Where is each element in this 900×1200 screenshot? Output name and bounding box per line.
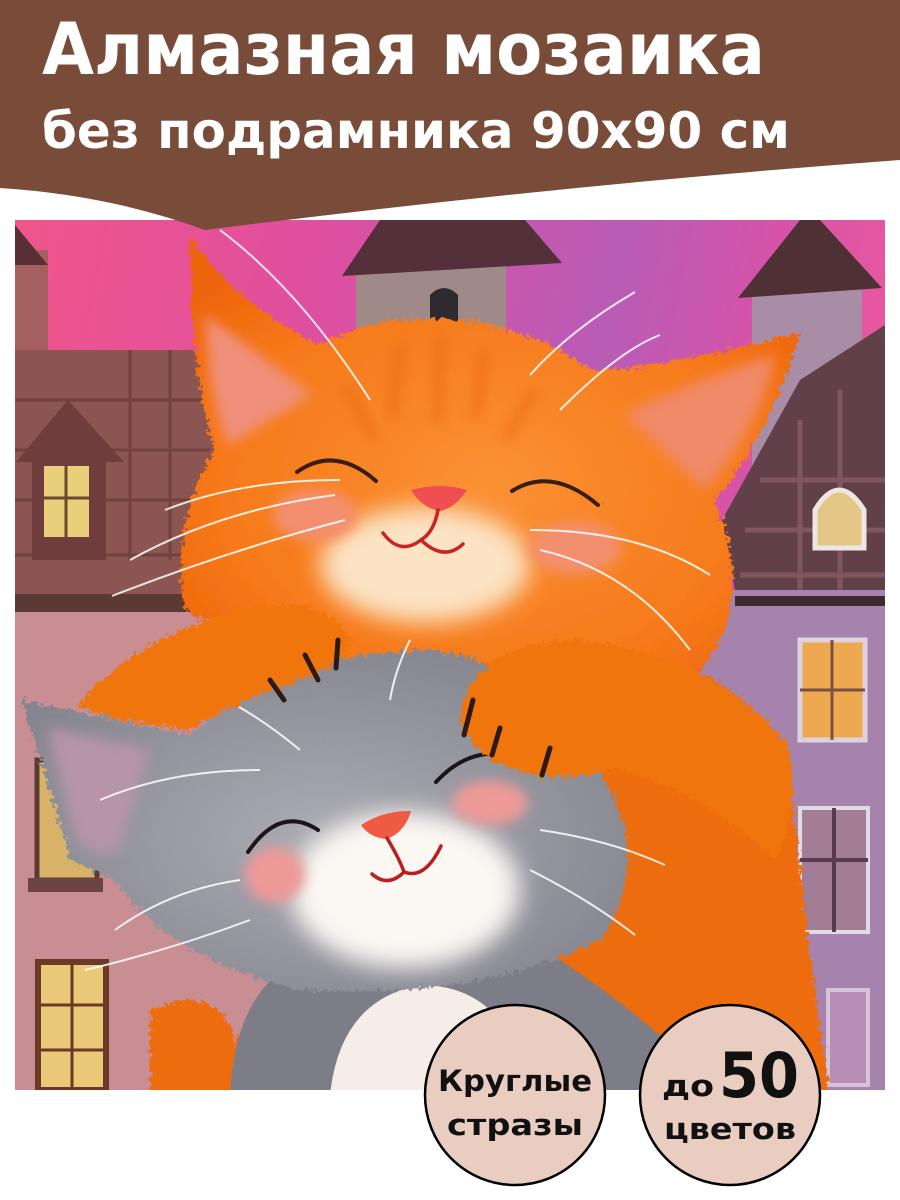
badge: up to 50 colours: до: [662, 1069, 714, 1103]
sky background: [15, 220, 885, 673]
badge: up to 50 colours: [640, 1005, 820, 1185]
muzzle: [320, 507, 530, 623]
nose: [361, 811, 411, 839]
eyes: [248, 753, 515, 852]
right ear inner: [625, 355, 775, 490]
subtitle: без подрамника 90х90 см: [42, 102, 790, 160]
building: center tower: [342, 220, 562, 334]
illustration: two cats on a rooftop: [15, 220, 885, 1095]
orange cat head: [112, 230, 800, 685]
orange cat body: [150, 645, 830, 1095]
white muzzle: [290, 812, 520, 968]
orange cat left paw: [78, 604, 352, 730]
grey cat: [20, 640, 665, 1095]
body: [230, 960, 665, 1095]
header banner: [0, 0, 900, 230]
building: right tower and house: [700, 220, 885, 1090]
head: [20, 650, 628, 991]
building: left house with roof and dormer: [15, 225, 270, 1090]
cheeks: [245, 847, 305, 903]
badge: round rhinestones: стразы: [447, 1108, 583, 1142]
orange cat right paw: [460, 640, 793, 860]
ear inner: [48, 728, 150, 853]
nose: [411, 486, 467, 511]
fur streaks: [348, 344, 534, 438]
left ear inner: [205, 315, 312, 445]
badge: round rhinestones: [425, 1005, 605, 1185]
cheeks: [273, 489, 357, 541]
whiskers: [112, 230, 710, 650]
badge: round rhinestones: Круглые: [438, 1064, 592, 1098]
badge: up to 50 colours: цветов: [664, 1112, 796, 1146]
mouth: [372, 838, 441, 881]
eyes: [297, 460, 598, 505]
badge: up to 50 colours: 50: [719, 1039, 799, 1112]
mouth: [383, 510, 463, 552]
title: Алмазная мозаика: [42, 7, 765, 91]
whiskers: [85, 640, 665, 970]
